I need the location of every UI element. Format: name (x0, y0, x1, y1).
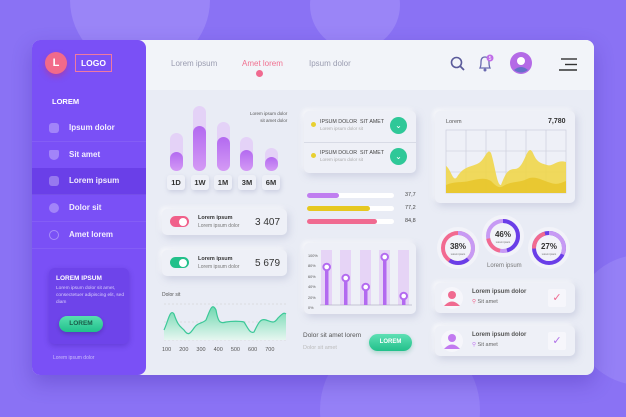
donut: 46% (482, 215, 524, 257)
logo circle (45, 52, 67, 74)
area chart: Dolor sit: 100 200 300 400 500 600 700 (162, 347, 274, 353)
header bar (140, 40, 594, 90)
toggle card 1 (162, 209, 287, 235)
donut: 27%: 27% (541, 242, 557, 251)
list card with checks: ⌄ (395, 152, 402, 161)
sidebar footer text: Lorem ipsum dolor (53, 355, 94, 361)
donut: 46%: Lorem ipsum (496, 241, 510, 244)
button LOREM: LOREM (380, 339, 401, 345)
timeframe labels: 1W (194, 178, 206, 187)
timeframe labels: 1M (218, 178, 228, 187)
timeframe labels (166, 177, 282, 194)
sidebar heading: LOREM (52, 97, 79, 106)
nav: Dolor sit (32, 195, 146, 222)
slider bar chart card (304, 243, 416, 314)
toggle card 1: Lorem ipsum dolor (198, 223, 239, 229)
profile card 1: Lorem ipsum dolor (472, 289, 526, 295)
list card with checks: IPSUM DOLOR SIT AMET (320, 150, 384, 156)
toggle card 1: Lorem ipsum (198, 215, 233, 221)
nav: Ipsum dolor (32, 115, 146, 142)
toggle card 2: Lorem ipsum dolor (198, 264, 239, 270)
donut: 38%: Lorem ipsum (451, 253, 465, 256)
nav: Lorem ipsum active: Lorem ipsum (69, 176, 119, 185)
donut: 27% (528, 228, 570, 268)
logo circle: L (53, 57, 59, 69)
dashboard main panel (32, 40, 594, 375)
slider bar chart card: 0% (308, 306, 314, 310)
toggle card 2: 5 679 (255, 258, 280, 269)
profile card 1: ✓ (552, 292, 562, 304)
nav: Ipsum dolor: Ipsum dolor (69, 123, 115, 132)
area chart: Dolor sit (162, 292, 286, 353)
header bar: Amet lorem (242, 59, 283, 68)
bar chart: timeframes: Lorem ipsum dolor (250, 111, 287, 116)
profile card 1: ⚲ Sit amet (472, 299, 498, 305)
logo box: LOGO (81, 58, 106, 68)
list card with checks: Lorem ipsum dolor sit (320, 126, 363, 131)
nav: Lorem ipsum active (32, 168, 146, 195)
header tabs: Lorem ipsum (171, 59, 217, 68)
line chart card: 7,780 (548, 118, 566, 125)
text: Dolor sit amet lorem: Dolor sit amet lorem (303, 332, 361, 339)
slider bar chart card: 60% (308, 275, 316, 279)
donut: 46%: 46% (495, 230, 511, 239)
toggle card 2 (162, 250, 287, 276)
timeframe labels: 1D (171, 178, 181, 187)
progress bars: 77,2 (405, 205, 416, 211)
icon: bell: 5 (489, 56, 492, 62)
timeframe labels: 6M (266, 178, 276, 187)
profile card 2: Lorem ipsum dolor (472, 332, 526, 338)
list card with checks (304, 111, 416, 173)
profile card 2: ✓ (552, 335, 562, 347)
donut: 27%: Lorem ipsum (542, 253, 556, 256)
slider bar chart card: 40% (308, 285, 316, 289)
timeframe labels: 3M (242, 178, 252, 187)
toggle card 1: 3 407 (255, 217, 280, 228)
nav: Sit amet (32, 142, 146, 169)
list card with checks: ⌄ (395, 121, 402, 130)
promo button: LOREM (69, 320, 93, 327)
icon: menu (559, 58, 577, 71)
progress bars: 84,8 (405, 218, 416, 224)
sidebar (32, 40, 146, 375)
profile card 2: ⚲ Sit amet (472, 342, 498, 348)
progress bars: 37,7 (405, 192, 416, 198)
area chart: Dolor sit: Dolor sit (162, 292, 180, 298)
sidebar promo card (49, 268, 129, 344)
nav: Sit amet: Sit amet (69, 150, 100, 159)
list card with checks: Lorem ipsum dolor sit (320, 157, 363, 162)
slider bar chart card: 20% (308, 296, 316, 300)
toggle card 2: Lorem ipsum (198, 256, 233, 262)
button LOREM (369, 334, 412, 351)
donut: 38%: 38% (450, 242, 466, 251)
logo box (75, 54, 112, 72)
line chart card: Lorem (446, 119, 462, 125)
bar chart: timeframes: sit amet dolor (260, 118, 287, 123)
sidebar promo card: LOREM IPSUM (56, 275, 102, 282)
bar chart: timeframes (170, 106, 288, 171)
sidebar promo card: Lorem ipsum dolor sit amet, consectetuer adipiscing elit, sed diam (56, 286, 124, 305)
nav: Dolor sit: Dolor sit (69, 203, 101, 212)
donut: 38% (437, 228, 479, 268)
icon: search (450, 56, 465, 71)
slider bar chart card: 100% (308, 254, 318, 258)
promo button (59, 316, 103, 332)
progress bars (307, 192, 416, 224)
profile card 1 (435, 283, 575, 313)
slider bar chart card: 80% (308, 264, 316, 268)
nav: Amet lorem: Amet lorem (69, 230, 113, 239)
text: Dolor sit amet lorem (303, 332, 361, 351)
icon: bell (479, 54, 494, 72)
donut caption: Lorem ipsum (487, 263, 522, 269)
icon: avatar (510, 52, 532, 74)
header bar: Ipsum dolor (309, 59, 351, 68)
text: Dolor sit amet lorem: Dolor sit amet (303, 345, 337, 351)
profile card 2 (435, 326, 575, 356)
list card with checks: IPSUM DOLOR SIT AMET (320, 119, 384, 125)
nav: Amet lorem (32, 222, 146, 249)
line chart card (435, 111, 575, 203)
